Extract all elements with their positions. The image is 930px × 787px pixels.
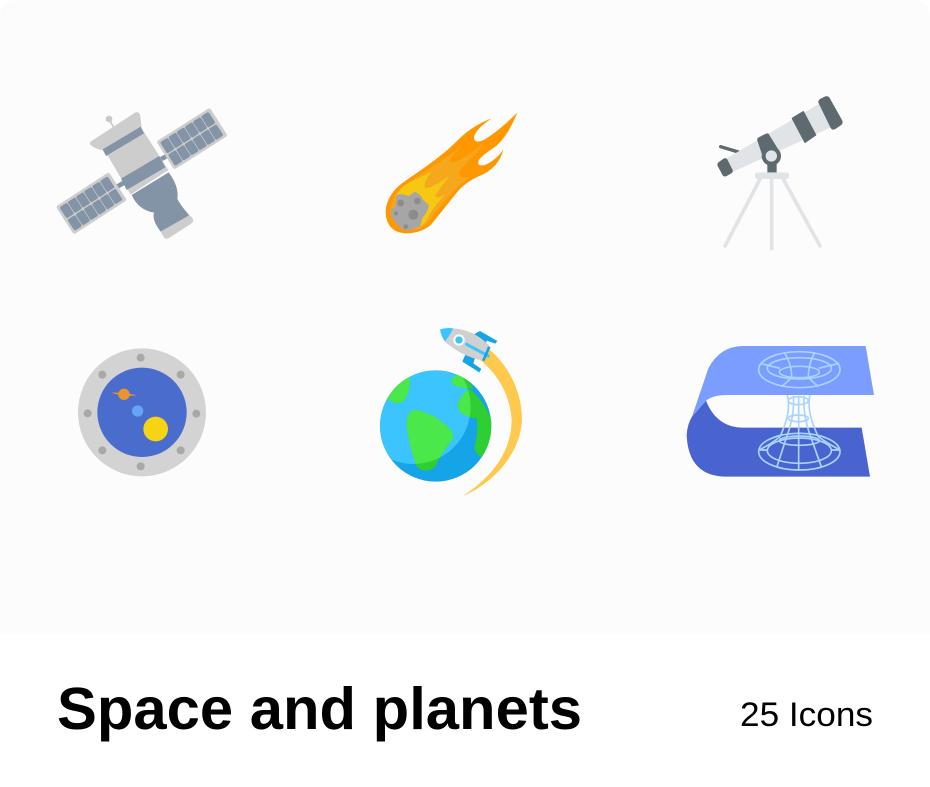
infographic canvas bbox=[56, 96, 874, 742]
icon count label: 25 Icons bbox=[740, 696, 873, 734]
icon: comet bbox=[386, 112, 517, 233]
icon: porthole with planets bbox=[78, 348, 206, 476]
icon: wormhole bbox=[687, 346, 874, 477]
title: Space and planets bbox=[57, 676, 582, 742]
icon: satellite bbox=[56, 108, 228, 239]
icon: telescope bbox=[717, 96, 843, 248]
icon: earth with rocket bbox=[380, 328, 522, 496]
